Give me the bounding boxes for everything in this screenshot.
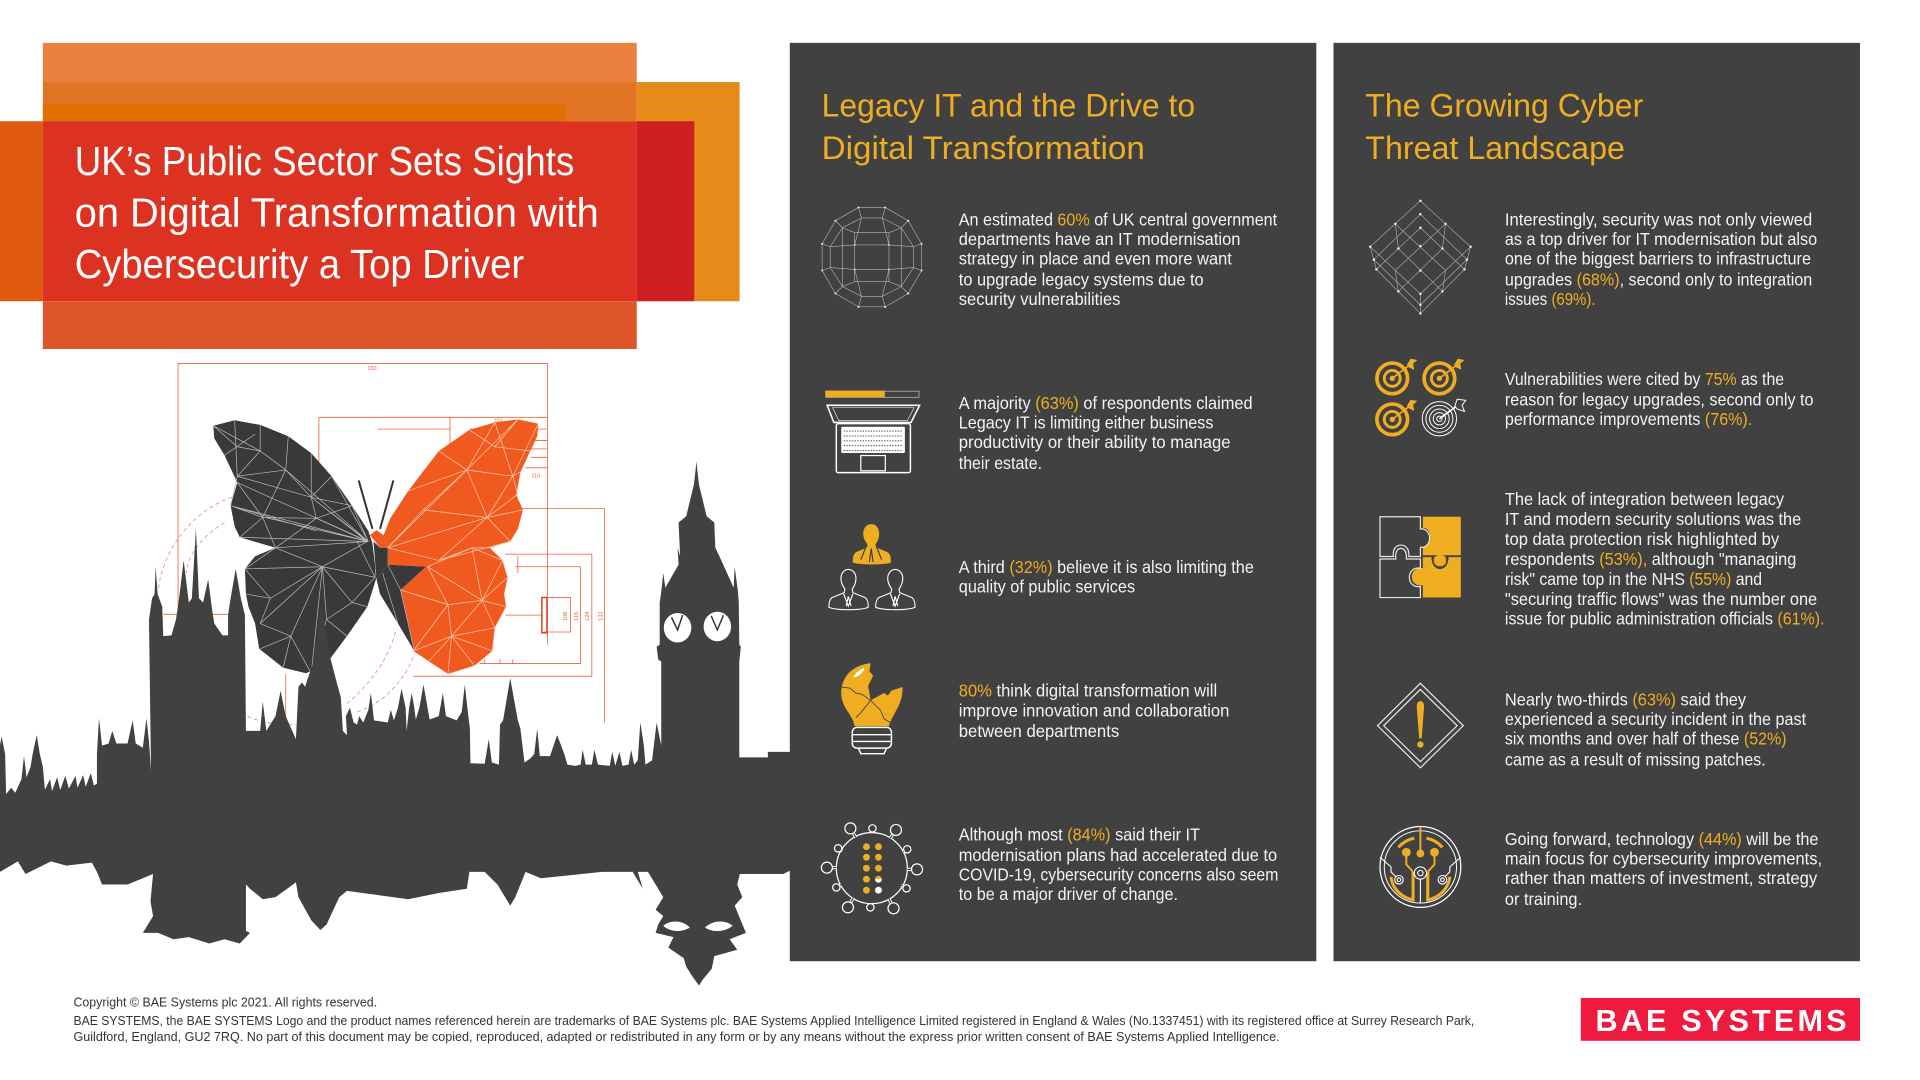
title banner with layered colour blocks (0, 43, 740, 349)
heading: The Growing Cyber (1365, 87, 1643, 123)
wing mesh left (213, 420, 414, 673)
text block: 32%: A third (32%) believe it is also limiting the (959, 557, 1254, 577)
left wing (213, 420, 377, 673)
text block: 53%, 55%, 61%: risk" came top in the NHS (55%) and (1505, 569, 1762, 589)
text block: 44% (1505, 829, 1822, 909)
technical drawing lines behind butterfly: 150 (367, 366, 377, 372)
icon: three business people (829, 524, 915, 610)
text block: 60%: An estimated 60% of UK central government (959, 209, 1277, 229)
icon: jigsaw puzzle (1380, 517, 1461, 598)
heading: Threat Landscape (1365, 130, 1625, 166)
text block: 68% and 69%: Interestingly, security was not only viewed (1505, 209, 1812, 229)
text block: 44%: or training. (1505, 889, 1582, 909)
icon: wireframe cube (1369, 200, 1472, 315)
text block: 32% (959, 557, 1254, 597)
text block: 80% (959, 681, 1229, 741)
technical drawing lines behind butterfly: 102 (493, 418, 503, 424)
technical drawing lines behind butterfly: 132 (598, 612, 604, 621)
icon: circuit roundel (1380, 827, 1461, 907)
title: on Digital Transformation with (75, 190, 599, 236)
clock hands (671, 615, 723, 630)
heading: Legacy IT and the Drive to (822, 87, 1195, 123)
text block: 53%, 55%, 61%: issue for public administration officials (61%). (1505, 608, 1824, 628)
text block: 75% and 76%: reason for legacy upgrades, second only to (1505, 389, 1813, 409)
technical drawing lines behind butterfly: 124 (585, 612, 591, 621)
technical drawing lines behind butterfly (158, 363, 605, 725)
text block: 53%, 55%, 61%: top data protection risk highlighted by (1505, 529, 1780, 549)
text block: 63%: their estate. (959, 453, 1042, 473)
footer copyright text (73, 995, 1474, 1044)
text block: 53%, 55%, 61%: The lack of integration between legacy (1505, 489, 1784, 509)
icon: virus with dots (821, 823, 923, 914)
text block: 84%: Although most (84%) said their IT (959, 825, 1200, 845)
text block: 80%: 80% think digital transformation will (959, 681, 1217, 701)
title (75, 138, 599, 287)
text block: 75% and 76%: Vulnerabilities were cited by 75% as the (1505, 369, 1784, 389)
text block: 68% and 69%: one of the biggest barriers to infrastructure (1505, 248, 1811, 268)
heading (822, 87, 1195, 166)
clock reflection (663, 921, 733, 931)
text block: 60%: to upgrade legacy systems due to (959, 269, 1204, 289)
title: Cybersecurity a Top Driver (75, 241, 524, 287)
text block: 63%: A majority (63%) of respondents claimed (959, 393, 1253, 413)
icon: warning diamond (1378, 683, 1463, 768)
footer copyright text: Copyright © BAE Systems plc 2021. All rights reserved. (73, 995, 377, 1010)
text block: 63% and 52%: Nearly two-thirds (63%) said they (1505, 689, 1747, 709)
text block: 84%: to be a major driver of change. (959, 884, 1178, 904)
logo: BAE Systems: BAE SYSTEMS (1596, 1004, 1847, 1038)
text block: 63% (959, 393, 1253, 473)
panel: the growing cyber threat landscape (1333, 43, 1860, 961)
butterfly (213, 419, 538, 674)
text block: 63% and 52%: came as a result of missing patches. (1505, 749, 1766, 769)
text block: 63% and 52%: experienced a security incident in the past (1505, 709, 1806, 729)
technical drawing lines behind butterfly: 110 (531, 474, 540, 480)
text block: 68% and 69%: issues (69%). (1505, 289, 1596, 309)
text block: 63%: Legacy IT is limiting either business (959, 413, 1213, 433)
icon: wireframe globe (821, 206, 923, 308)
text block: 68% and 69% (1505, 209, 1817, 309)
clock faces (664, 613, 691, 642)
text block: 84%: COVID-19, cybersecurity concerns also seem (959, 864, 1278, 884)
text block: 53%, 55%, 61%: "securing traffic flows" was the number one (1505, 589, 1817, 609)
text block: 44%: Going forward, technology (44%) will be the (1505, 829, 1818, 849)
footer copyright text: Guildford, England, GU2 7RQ. No part of this document may be copied, reproduced, adapted or redistributed in any form or by any means without the express prior written consent of BAE Systems Applied Intelligence. (73, 1029, 1280, 1044)
London skyline silhouette with Big Ben and reflection (0, 462, 792, 986)
text block: 44%: main focus for cybersecurity improvements, (1505, 848, 1822, 868)
text block: 53%, 55%, 61%: IT and modern security solutions was the (1505, 509, 1801, 529)
text block: 53%, 55%, 61%: respondents (53%), although "managing (1505, 549, 1796, 569)
text block: 75% and 76%: performance improvements (76%). (1505, 409, 1752, 429)
technical drawing lines behind butterfly: 108 (563, 612, 569, 621)
body and antennae (370, 530, 388, 548)
text block: 32%: quality of public services (959, 577, 1135, 597)
wing mesh right (388, 419, 538, 674)
right wing (384, 419, 538, 674)
text block: 60%: strategy in place and even more want (959, 248, 1232, 268)
panel: legacy IT and the drive to digital transformation (790, 43, 1316, 961)
text block: 60% (959, 209, 1277, 309)
footer copyright text: BAE SYSTEMS, the BAE SYSTEMS Logo and the product names referenced herein are trademarks of BAE Systems plc. BAE Systems Applied Intelligence Limited registered in England & Wales (No.1337451) with its registered office at Surrey Research Park, (73, 1013, 1474, 1028)
text block: 63%: productivity or their ability to manage (959, 432, 1231, 452)
text block: 60%: departments have an IT modernisation (959, 229, 1240, 249)
text block: 80%: between departments (959, 721, 1119, 741)
text block: 68% and 69%: upgrades (68%), second only to integration (1505, 269, 1812, 289)
text block: 84%: modernisation plans had accelerated due to (959, 845, 1277, 865)
icon: cracked light bulb (841, 663, 903, 754)
text block: 63% and 52% (1505, 689, 1806, 769)
technical drawing lines behind butterfly: 116 (574, 612, 580, 621)
text block: 80%: improve innovation and collaboration (959, 700, 1229, 720)
icon: four targets (1377, 359, 1466, 436)
text block: 53%, 55%, 61% (1505, 489, 1824, 628)
lower right dark wing section (377, 565, 426, 651)
text block: 60%: security vulnerabilities (959, 289, 1120, 309)
text block: 68% and 69%: as a top driver for IT modernisation but also (1505, 229, 1817, 249)
text block: 84% (959, 825, 1278, 904)
text block: 63% and 52%: six months and over half of these (52%) (1505, 728, 1787, 748)
title: UK’s Public Sector Sets Sights (75, 138, 574, 184)
icon: laptop with progress bar (825, 391, 920, 473)
heading (1365, 87, 1643, 166)
text block: 44%: rather than matters of investment, strategy (1505, 868, 1818, 888)
text block: 75% and 76% (1505, 369, 1813, 429)
heading: Digital Transformation (822, 130, 1145, 166)
